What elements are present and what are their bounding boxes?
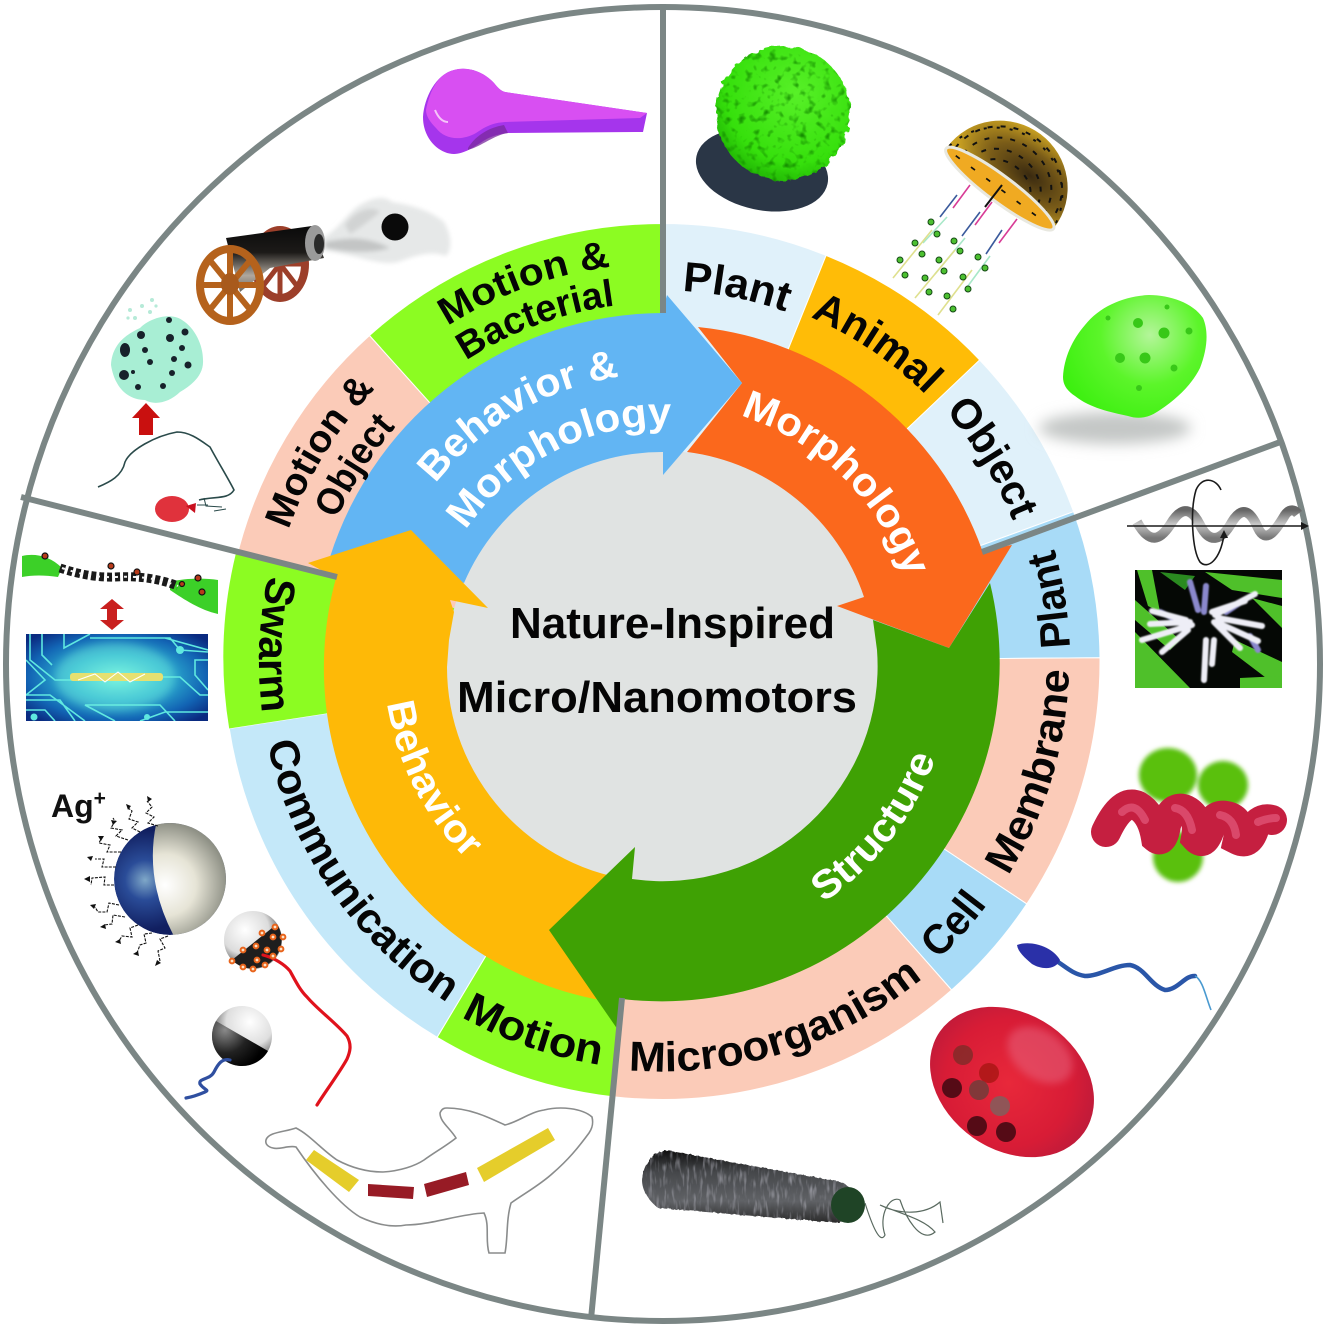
back wheel: [255, 230, 305, 298]
label: object: Object: [952, 398, 1036, 520]
label: bacterial: Bacterial: [454, 278, 612, 360]
label: structure: Structure: [812, 754, 933, 898]
label: animal: Animal: [812, 296, 945, 393]
center disc: [446, 451, 878, 883]
icon: red double arrow: [100, 599, 124, 630]
icon: swarm sheet with molecule chain: [22, 553, 218, 614]
icon: helix with rotation: [1127, 480, 1309, 565]
ring labels: [258, 242, 1070, 1072]
barrel: [226, 226, 324, 292]
icon: sperm motor: [1017, 943, 1211, 1010]
motor segments: [306, 1150, 359, 1192]
icon: tubular micromotor: [642, 1150, 943, 1238]
label: microorganism: Microorganism: [632, 964, 921, 1072]
label: Ag+: +: [94, 787, 106, 810]
label: plant: Plant: [685, 262, 792, 312]
label: plant right: Plant: [1029, 550, 1070, 647]
segment: plant (structure): [662, 512, 1100, 662]
front wheel: [198, 248, 262, 322]
icon: janus sphere with blue tail: [186, 1006, 272, 1098]
label: communication: Communication: [270, 740, 455, 1002]
icon: red up arrow: [132, 403, 160, 435]
segment: motion: [437, 662, 662, 1097]
center title: [457, 599, 857, 722]
icon: janus particle with Ag+: [52, 792, 226, 966]
label: morphology orange: Morphology: [743, 390, 926, 570]
icon: teal bubble cluster: [111, 298, 203, 403]
green glows: [1139, 748, 1248, 882]
icon: green rough sphere with shadow: [688, 46, 850, 223]
label: object second line: Object: [317, 414, 396, 514]
title line 1: Nature-Inspired: [510, 599, 835, 648]
sphere: [114, 823, 226, 935]
label: morphology blue: Morphology: [445, 404, 671, 528]
strands: [893, 185, 1017, 315]
dome: [938, 94, 1094, 239]
muzzle: [305, 225, 325, 261]
squiggles: [91, 801, 168, 961]
icon: jellyfish motor: [893, 94, 1094, 315]
icon: cannon firing: [198, 198, 450, 322]
label: motion and: Motion &: [265, 378, 374, 528]
label: membrane: Membrane: [984, 670, 1069, 874]
cannon ball: [382, 214, 408, 240]
title line 2: Micro/Nanomotors: [457, 673, 857, 722]
green beads: [897, 219, 988, 312]
label: behavior and: Behavior &: [416, 352, 618, 482]
icon: dolphin with segmented motor: [266, 1108, 593, 1253]
label: cell: Cell: [924, 888, 986, 954]
segment: plant (morphology): [662, 224, 826, 662]
label: behavior: Behavior: [387, 700, 482, 854]
label: Ag+: Ag: [51, 788, 94, 824]
segment: motion and bacterial: [370, 224, 662, 662]
arrow labels: [387, 352, 933, 898]
segment: microorganism: [612, 662, 952, 1099]
arrow: morphology: [687, 327, 1012, 648]
icon: red blood cell: [901, 976, 1123, 1188]
icon: circuit board panel: [26, 634, 208, 721]
segment: cell: [662, 662, 1027, 990]
icon: balloon on wire: [98, 432, 234, 522]
segment: motion and object: [236, 336, 662, 662]
label: motion and top: Motion &: [436, 242, 610, 324]
icon: purple tadpole motor: [423, 69, 647, 154]
segment: animal: [662, 255, 980, 662]
label: motion: Motion: [464, 992, 600, 1064]
segment: swarm: [223, 553, 662, 728]
icon: green pitted particle: [1039, 295, 1207, 444]
arrow: structure: [549, 583, 1000, 1030]
segment: membrane: [662, 658, 1100, 904]
icon: flower photo: [1135, 570, 1282, 690]
arrow: behavior and morphology: [330, 295, 742, 583]
category ring: [223, 224, 1100, 1099]
icon: red coil with green spheres: [1106, 748, 1276, 882]
smoke: [323, 198, 450, 263]
arrow: behavior: [308, 530, 640, 1000]
segment: communication: [229, 662, 662, 1037]
label: swarm: Swarm: [258, 578, 295, 710]
icon: particle with orange dots and red tail: [224, 911, 350, 1105]
segment: object: [662, 360, 1074, 662]
coil: [1106, 804, 1272, 841]
